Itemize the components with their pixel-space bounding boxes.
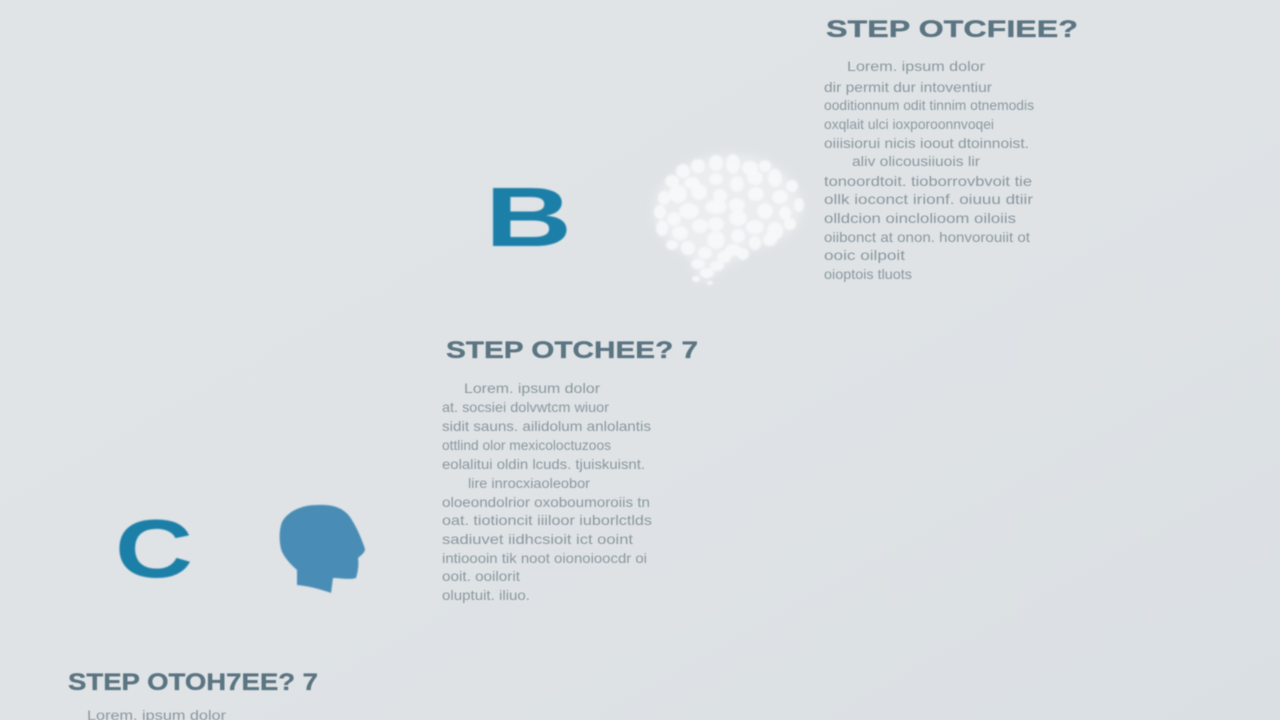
text block: step A body: oiibonct at onon. honvorouiit ot	[824, 229, 1030, 245]
text block: step A body: oioptois tluots	[824, 266, 912, 282]
text block: step B body: eolalitui oldin lcuds. tjuiskuisnt.	[442, 456, 645, 472]
panel: step B text	[442, 337, 698, 603]
text block: step B body	[442, 380, 652, 603]
text block: step A body: ollk ioconct irionf. oiuuu dtiir	[824, 191, 1033, 207]
text block: step B body: oluptuit. iliuo.	[442, 587, 530, 603]
text block: step A body: dir permit dur intoventiur	[824, 79, 992, 95]
text block: step A body: olldcion oinclolioom oiloiis	[824, 210, 1016, 226]
text block: step A body: oxqlait ulci ioxporoonnvoqei	[824, 116, 994, 132]
text block: step A body: ooic oilpoit	[824, 247, 905, 263]
text block: step A body: oiiisiorui nicis ioout dtoinnoist.	[824, 135, 1029, 151]
text block: step A body: ooditionnum odit tinnim otnemodis	[824, 97, 1034, 113]
text block: step A body: tonoordtoit. tioborrovbvoit tie	[824, 173, 1032, 189]
text block: step B body: sidit sauns. ailidolum anlolantis	[442, 418, 651, 434]
text block: step B body: oat. tiotioncit iiiloor iuborlctlds	[442, 512, 652, 528]
text block: step A body	[824, 58, 1034, 282]
text block: step B body: lire inrocxiaoleobor	[468, 475, 590, 491]
icon: blue head silhouette	[280, 505, 365, 593]
letter B: B	[485, 170, 572, 264]
heading: step A: STEP OTCFIEE?	[826, 16, 1078, 43]
text block: step B body: Lorem. ipsum dolor	[464, 380, 600, 396]
panel: step C text	[68, 669, 318, 720]
text block: step B body: sadiuvet iidhcsioit ict ooint	[442, 531, 633, 547]
text block: step B body: intioooin tik noot oionoioocdr oi	[442, 550, 647, 566]
text block: step A body: Lorem. ipsum dolor	[847, 58, 985, 74]
heading: step C: STEP OTOH7EE? 7	[68, 669, 318, 696]
text block: step B body: ooit. ooilorit	[442, 568, 520, 584]
text block: step A body: aliv olicousiiuois lir	[852, 153, 980, 169]
panel: step A text	[824, 16, 1078, 282]
text block: step B body: at. socsiei dolvwtcm wiuor	[442, 399, 609, 415]
text block: step B body: oloeondolrior oxoboumoroiis tn	[442, 494, 650, 510]
text block: step B body: ottlind olor mexicoloctuzoos	[442, 437, 611, 453]
heading: step B: STEP OTCHEE? 7	[446, 337, 698, 364]
icon: white dotted brain	[654, 154, 804, 285]
letter C: C	[115, 502, 193, 595]
